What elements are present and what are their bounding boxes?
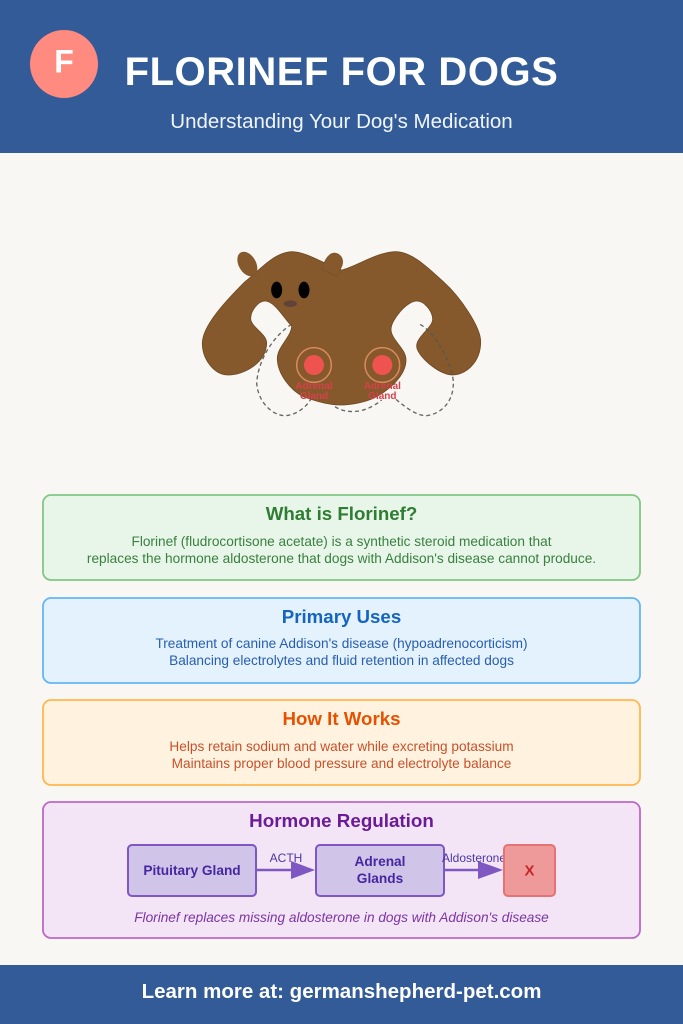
missing hormone box: X — [524, 862, 535, 880]
arrow: aldosterone: Aldosterone — [442, 851, 506, 865]
adrenal glands box: Glands — [357, 871, 404, 886]
left adrenal gland — [295, 348, 333, 402]
caption: Florinef replaces missing aldosterone in dogs with Addison's disease — [134, 910, 549, 925]
heading: Hormone Regulation — [249, 810, 434, 831]
panel: what is florinef: replaces the hormone aldosterone that dogs with Addison's disease cannot produce. — [87, 551, 596, 566]
dog illustration — [202, 249, 481, 416]
arrow: acth: ACTH — [270, 851, 302, 865]
arrow: acth — [256, 851, 315, 879]
adrenal glands box: Adrenal — [355, 854, 405, 869]
icon: F badge — [30, 30, 98, 98]
panel: what is florinef: Florinef (fludrocortisone acetate) is a synthetic steroid medication that — [131, 534, 552, 549]
missing hormone box — [504, 845, 555, 896]
adrenal glands box — [316, 845, 444, 896]
panel: what is florinef — [43, 495, 640, 580]
panel: primary uses: Primary Uses — [282, 606, 401, 627]
icon: F badge: F — [54, 44, 74, 80]
icon: right ear — [321, 253, 343, 277]
dog body — [202, 252, 481, 405]
subtitle: Understanding Your Dog's Medication — [170, 110, 513, 133]
left adrenal gland: Gland — [300, 391, 328, 402]
arrow: aldosterone — [442, 851, 506, 879]
panel: primary uses: Balancing electrolytes and fluid retention in affected dogs — [169, 653, 514, 668]
right adrenal gland: Gland — [368, 391, 396, 402]
panel: hormone regulation — [43, 802, 640, 938]
dashed leash lines — [257, 324, 453, 416]
title: FLORINEF FOR DOGS — [125, 50, 558, 94]
icon: left ear — [234, 249, 261, 279]
icon: nose — [284, 300, 297, 307]
footer: Learn more at: germanshepherd-pet.com — [142, 980, 541, 1003]
panel: how it works — [43, 700, 640, 785]
panel: how it works: Helps retain sodium and water while excreting potassium — [169, 739, 514, 754]
panel: how it works: Maintains proper blood pressure and electrolyte balance — [172, 756, 511, 771]
footer — [0, 965, 683, 1024]
panel: how it works: How It Works — [282, 708, 401, 729]
panel: primary uses — [43, 598, 640, 683]
panel: primary uses: Treatment of canine Addison's disease (hypoadrenocorticism) — [155, 636, 528, 651]
pituitary gland box — [128, 845, 256, 896]
icon: eyes — [271, 282, 309, 298]
right adrenal gland — [364, 348, 401, 402]
panel: what is florinef: What is Florinef? — [266, 503, 417, 524]
right adrenal gland: Adrenal — [364, 381, 401, 392]
pituitary gland box: Pituitary Gland — [143, 863, 241, 878]
header — [0, 0, 683, 153]
left adrenal gland: Adrenal — [295, 381, 333, 392]
